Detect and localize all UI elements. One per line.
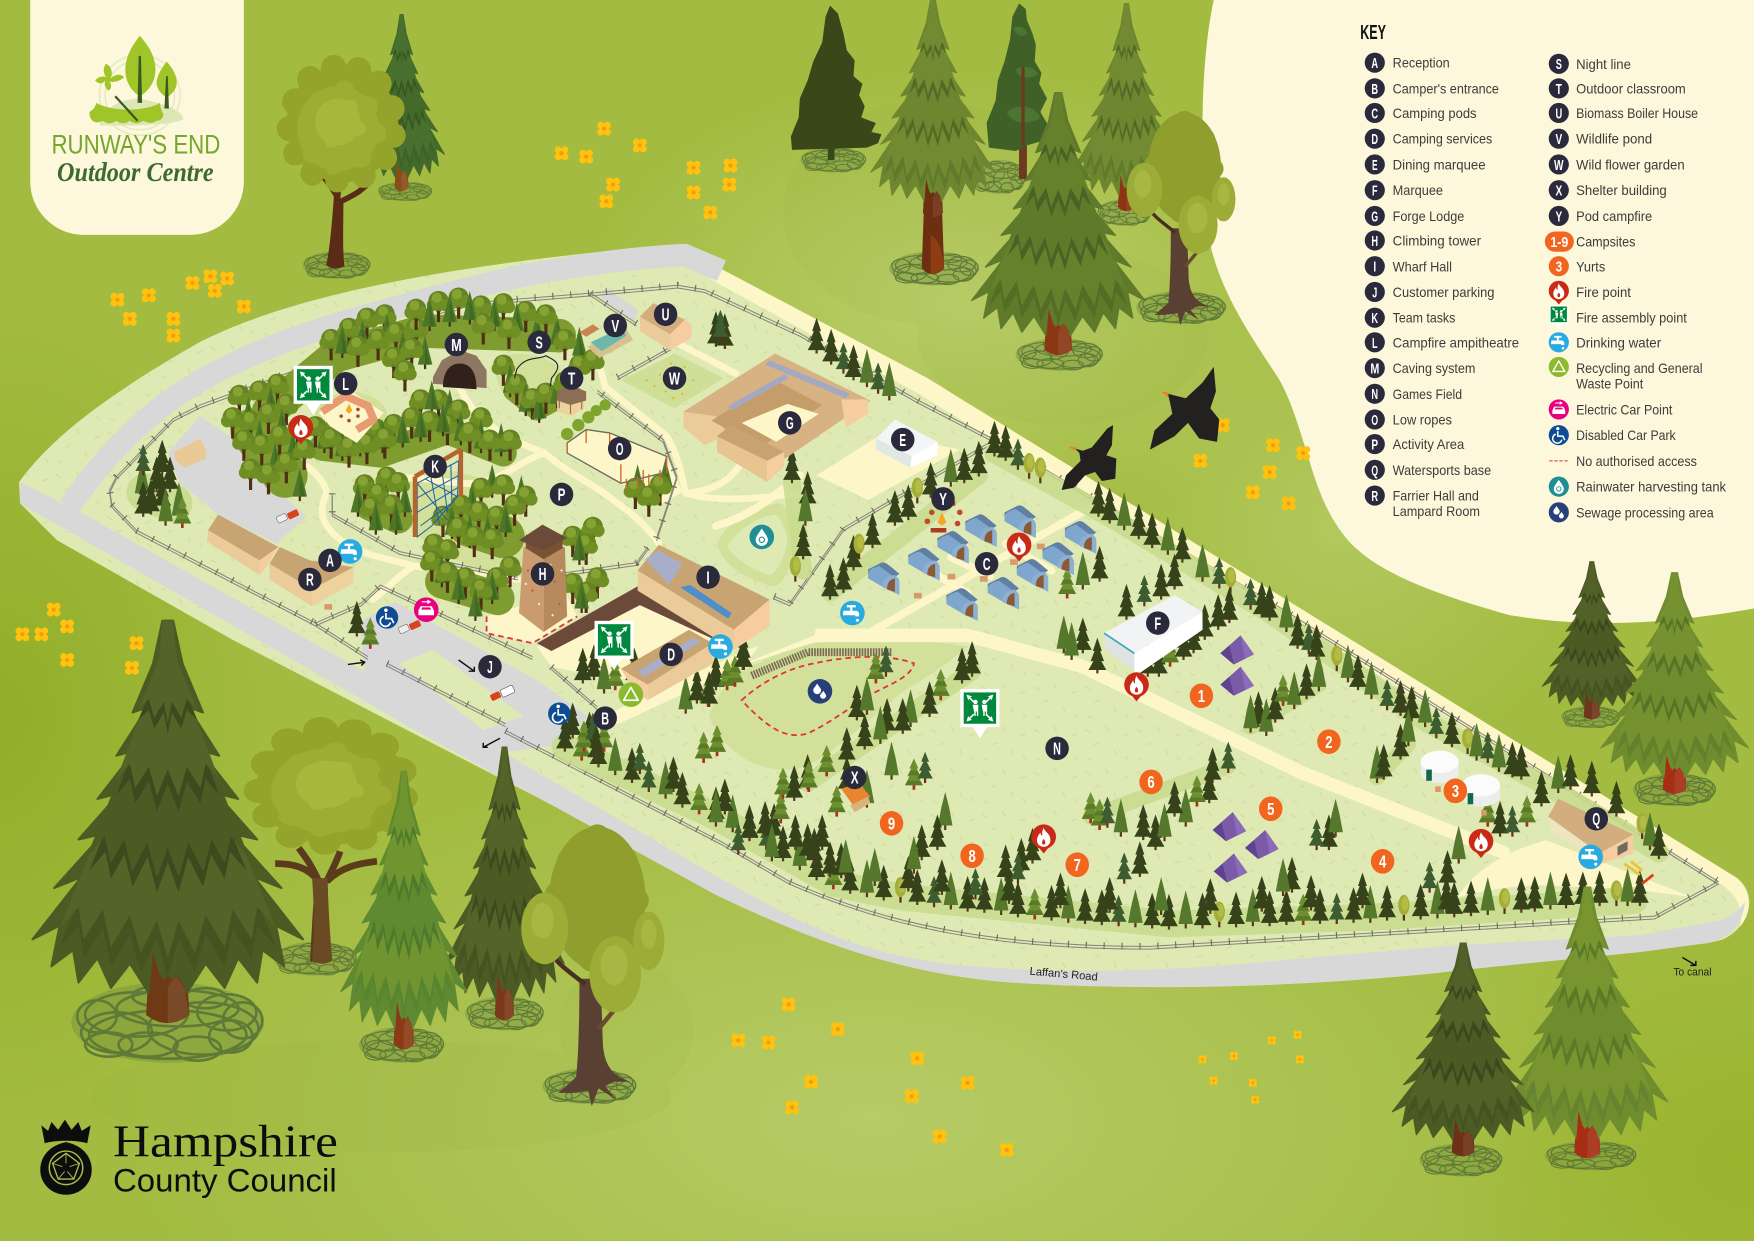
buildings [175, 303, 1653, 884]
label: to canal: To canal [1673, 966, 1711, 978]
marker: letter badges: E [899, 430, 906, 450]
marker: campsite numbers: 9 [888, 814, 895, 834]
key: B Camper's entrance: Camper's entrance [1393, 80, 1499, 96]
wordmark: Hampshire: Hampshire [113, 1116, 338, 1167]
key: N Games Field: N [1371, 386, 1378, 403]
pine groups on the camping fields [134, 310, 1520, 913]
marker: letter badges: W [669, 368, 681, 388]
building: T outdoor classroom [557, 385, 586, 416]
tree: leafy tree top right [1127, 111, 1235, 325]
key: L Campfire ampitheatre [1365, 332, 1519, 352]
logo mark [89, 36, 183, 135]
marker: letter badges: P [558, 485, 565, 505]
key: O Low ropes [1365, 409, 1452, 430]
site map [19, 244, 1749, 987]
key: L Campfire ampitheatre: Campfire ampitheatre [1393, 334, 1519, 350]
logo title: RUNWAY'S END [51, 129, 220, 159]
road label: Forge Ln: Forge Ln [348, 302, 396, 333]
west woodland canopy backing [253, 331, 570, 598]
tree scribble shadows [800, 147, 1226, 371]
green mounds [315, 353, 968, 770]
pine row north-east [986, 421, 1668, 859]
cars [276, 508, 515, 702]
key: Fire point: Fire point [1576, 284, 1631, 300]
car parks [168, 416, 587, 752]
key: Rainwater harvesting tank: Rainwater harvesting tank [1576, 479, 1726, 495]
building: V wildlife pond [579, 324, 633, 358]
marker: letter badges: R [306, 570, 314, 590]
key: Q Watersports base [1365, 460, 1491, 480]
key: X Shelter building: X [1555, 183, 1562, 200]
tree: spruce behind [987, 3, 1048, 179]
key: X Shelter building [1549, 180, 1667, 200]
marker: electric car point [414, 597, 438, 622]
marker: disabled car park [376, 606, 570, 725]
yurts [1421, 751, 1500, 807]
building: A reception [207, 515, 279, 575]
key: Electric Car Point: Electric Car Point [1576, 401, 1672, 417]
marker: campsite numbers: 1 [1198, 686, 1205, 706]
key: No authorised access: No authorised access [1576, 453, 1697, 469]
key: W Wild flower garden: Wild flower garden [1576, 156, 1685, 172]
key: D Camping services: Camping services [1393, 131, 1492, 147]
building: Q watersports base [1548, 799, 1633, 864]
marker: campsite numbers: 7 [1074, 855, 1081, 875]
key: A Reception: Reception [1393, 55, 1450, 71]
key: B Camper's entrance [1365, 78, 1499, 98]
tents [1213, 635, 1279, 883]
key: F Marquee [1365, 180, 1443, 200]
key: P Activity Area: Activity Area [1393, 436, 1465, 452]
key: N Games Field [1365, 384, 1462, 404]
building: M caving system [433, 350, 487, 389]
key: J Customer parking: J [1372, 284, 1377, 301]
key: Rainwater harvesting tank [1549, 477, 1726, 497]
key: T Outdoor classroom: T [1556, 81, 1562, 98]
key: Drinking water: Drinking water [1576, 334, 1662, 350]
key: I Wharf Hall: Wharf Hall [1393, 258, 1452, 274]
marker: letter badges [298, 303, 1608, 831]
key: L Campfire ampitheatre: L [1372, 335, 1378, 352]
key: C Camping pods [1365, 103, 1477, 123]
key: E Dining marquee: Dining marquee [1393, 156, 1486, 172]
key: F Marquee: F [1372, 183, 1378, 200]
trees bottom right [1392, 887, 1668, 1177]
panel: key background [1203, 0, 1754, 623]
key: J Customer parking: Customer parking [1393, 284, 1494, 300]
wild flowers [15, 122, 1310, 1157]
key: Disabled Car Park: Disabled Car Park [1576, 427, 1676, 443]
trees top right group [791, 0, 1235, 371]
key: D Camping services: D [1371, 131, 1378, 148]
key: T Outdoor classroom [1549, 78, 1686, 98]
tree: big dark pine [32, 621, 303, 1023]
key: 1-9 Campsites [1545, 232, 1635, 252]
bird: lower chough [1062, 425, 1116, 490]
key: H Climbing tower: H [1371, 233, 1378, 250]
marker: letter badges: J [487, 657, 493, 677]
key: Electric Car Point [1549, 399, 1672, 420]
tree: large pine front [972, 93, 1145, 355]
kayaks [1624, 861, 1653, 884]
key: Recycling and General Waste Point: Recycling and General [1576, 360, 1703, 376]
marker: letter badges: I [706, 567, 710, 587]
tree: lower-left oak [244, 717, 418, 964]
marker: campsite numbers: 4 [1379, 852, 1387, 872]
key: Y Pod campfire [1549, 206, 1652, 226]
logo: Hampshire County Council [40, 1116, 338, 1198]
marker: letter badges: Q [1592, 809, 1600, 829]
key: M Caving system: Caving system [1393, 360, 1475, 376]
key: R Farrier Hall and Lampard Room [1365, 485, 1480, 519]
key: G Forge Lodge: Forge Lodge [1393, 208, 1465, 224]
key: B Camper's entrance: B [1371, 81, 1378, 98]
road: Forge Ln [69, 255, 722, 507]
building: F marquee [1104, 595, 1203, 677]
road label: Laffan's Road: Laffan's Road [1029, 966, 1098, 984]
marker: letter badges: D [667, 645, 675, 665]
key: I Wharf Hall [1365, 256, 1452, 276]
marker: letter badges: N [1053, 739, 1061, 759]
key: R Farrier Hall and Lampard Room: R [1371, 488, 1378, 505]
building: R Farrier Hall [270, 547, 353, 606]
key: P Activity Area [1365, 434, 1465, 454]
tree shadows web [89, 101, 1208, 1152]
fences [110, 285, 1718, 949]
building: X shelter [841, 783, 870, 812]
marker: campsite numbers: 2 [1325, 732, 1333, 752]
team tasks net: K [415, 450, 461, 537]
key: O Low ropes: Low ropes [1393, 412, 1452, 428]
tree: dark silhouette pine [791, 6, 881, 160]
birds: black choughs [1062, 367, 1219, 490]
key: I Wharf Hall: I [1373, 259, 1376, 276]
trees bottom left [32, 621, 664, 1106]
key: 1-9 Campsites: 1-9 [1550, 234, 1568, 251]
marker: letter badges: A [326, 551, 334, 571]
key title: KEY [1360, 22, 1386, 44]
key: U Biomass Boiler House: U [1555, 105, 1562, 122]
tree: top-left pine [359, 15, 445, 191]
wordmark: County Council: County Council [113, 1162, 337, 1198]
key: E Dining marquee: E [1372, 157, 1378, 174]
building: L campfire amphitheatre [319, 393, 384, 443]
key: Recycling and General Waste Point [1549, 357, 1703, 392]
key: Disabled Car Park [1549, 425, 1676, 445]
key: R Farrier Hall and Lampard Room: Lampard Room [1393, 503, 1480, 519]
key: Q Watersports base: Q [1371, 462, 1378, 479]
marker: letter badges: K [431, 457, 439, 477]
bird: upper chough [1150, 367, 1219, 450]
tree: bottom-right light pine [1507, 887, 1668, 1158]
key: J Customer parking [1365, 282, 1494, 302]
key: Sewage processing area [1549, 502, 1714, 522]
key: Drinking water [1549, 332, 1662, 352]
key: 3 Yurts: Yurts [1576, 258, 1605, 274]
building: U biomass boiler house [640, 303, 691, 350]
marker: fire assembly points [294, 366, 999, 738]
key: D Camping services [1365, 129, 1492, 149]
forest shading halos [145, 453, 1659, 924]
key: C Camping pods: C [1371, 105, 1378, 122]
key: K Team tasks: Team tasks [1393, 310, 1455, 326]
cream boundary track [688, 245, 1749, 926]
key: N Games Field: Games Field [1393, 386, 1462, 402]
key: M Caving system: M [1370, 361, 1379, 378]
cream paths [308, 343, 1692, 897]
pine row south [556, 702, 1649, 930]
bushes by low ropes [561, 399, 611, 440]
building: E dining marquee [876, 419, 937, 468]
key: Sewage processing area: Sewage processing area [1576, 504, 1714, 520]
key legend [1360, 22, 1726, 522]
marker: campsite numbers: 6 [1147, 772, 1155, 792]
marker: sewage area [808, 679, 832, 704]
tree: top-left oak [277, 55, 406, 268]
building: small store by forge lane [175, 439, 206, 468]
marker: letter badges: G [786, 413, 794, 433]
key: 1-9 Campsites: Campsites [1576, 234, 1635, 250]
site land [19, 244, 1749, 987]
key: U Biomass Boiler House [1549, 103, 1698, 123]
key: W Wild flower garden [1549, 154, 1685, 175]
marker: letter badges: M [451, 335, 462, 355]
marker: letter badges: V [611, 316, 619, 336]
marker: letter badges: Y [939, 489, 947, 509]
panel: logo [30, 0, 244, 235]
woodland clusters west [221, 287, 673, 621]
marker: letter badges: C [983, 554, 991, 574]
trees top left group [277, 15, 445, 279]
marker: fire points [289, 415, 1493, 858]
marker: letter badges: L [342, 374, 349, 394]
road: Laffan's Road [20, 482, 1745, 987]
key: Fire assembly point: Fire assembly point [1576, 310, 1687, 326]
key: V Wildlife pond [1549, 129, 1652, 149]
key: X Shelter building: Shelter building [1576, 182, 1667, 198]
key: S Night line: Night line [1576, 56, 1631, 72]
key: Recycling and General Waste Point: Waste Point [1576, 376, 1643, 392]
road: access strip [604, 293, 635, 315]
key: R Farrier Hall and Lampard Room: Farrier Hall and [1393, 488, 1479, 504]
key: 3 Yurts [1549, 256, 1605, 276]
arrow: to canal [1682, 958, 1696, 965]
crest [40, 1120, 92, 1195]
key: S Night line: S [1556, 56, 1562, 73]
marker: letter badges: U [662, 305, 669, 325]
marker: campsite numbers [880, 683, 1467, 877]
campfire: Y pod campfire [925, 501, 963, 532]
tree: tall pine [871, 0, 995, 274]
key: K Team tasks [1365, 308, 1455, 328]
timber fence at sewage area [752, 652, 892, 676]
wild flowers dots W [645, 362, 695, 399]
key: P Activity Area: P [1371, 437, 1378, 454]
marker: letter badges: F [1154, 613, 1161, 633]
key: G Forge Lodge: G [1371, 208, 1378, 225]
key: V Wildlife pond: V [1555, 131, 1562, 148]
key: E Dining marquee [1365, 154, 1486, 175]
key: 3 Yurts: 3 [1555, 259, 1562, 276]
marker: recycling [619, 682, 643, 707]
key: C Camping pods: Camping pods [1393, 105, 1477, 121]
marker: campsite numbers: 5 [1267, 799, 1275, 819]
arrows on the roads [348, 660, 500, 747]
sewage area no-access line [742, 657, 914, 735]
marker: letter badges: O [616, 439, 624, 459]
low ropes: O [567, 430, 667, 490]
tree: bottom-right dark pine [1392, 943, 1534, 1156]
building: I Wharf Hall [537, 545, 770, 651]
marker: drinking water [338, 539, 1603, 869]
key: O Low ropes: O [1371, 412, 1378, 429]
key: M Caving system [1365, 358, 1475, 378]
key: S Night line [1549, 54, 1631, 74]
pallets [324, 544, 1487, 815]
map markers [289, 303, 1608, 877]
key: Fire assembly point [1549, 305, 1687, 329]
key: F Marquee: Marquee [1393, 182, 1443, 198]
key: G Forge Lodge [1365, 206, 1465, 226]
marker: campsite numbers: 3 [1452, 781, 1459, 801]
key: Q Watersports base: Watersports base [1393, 462, 1491, 478]
marker: letter badges: H [539, 564, 546, 584]
key: H Climbing tower: Climbing tower [1393, 233, 1481, 249]
marker: letter badges: S [536, 333, 543, 353]
marker: letter badges: B [601, 708, 609, 728]
key: H Climbing tower [1365, 230, 1481, 251]
tree: pine far right back [1074, 3, 1179, 211]
tree: mid-green pine [341, 772, 467, 1050]
marker: campsite numbers: 8 [968, 846, 976, 866]
trees right [1542, 562, 1748, 806]
net line: S night line [515, 356, 558, 386]
tree: pine behind [445, 747, 564, 1021]
tree: right dark pine [1542, 562, 1642, 719]
key: A Reception [1365, 53, 1450, 73]
logo subtitle: Outdoor Centre [57, 157, 214, 188]
key: U Biomass Boiler House: Biomass Boiler House [1576, 105, 1698, 121]
pods: camping pods [868, 505, 1096, 621]
marker: letter badges: T [568, 368, 576, 388]
key: W Wild flower garden: W [1554, 157, 1564, 174]
marker: letter badges: X [851, 768, 859, 788]
key: A Reception: A [1371, 55, 1378, 72]
key: V Wildlife pond: Wildlife pond [1576, 131, 1652, 147]
building: D camping services [621, 630, 713, 700]
building: H climbing tower [519, 525, 567, 632]
key: Y Pod campfire: Pod campfire [1576, 208, 1652, 224]
marker: rainwater tank [749, 525, 774, 549]
tree: leafy tree [521, 824, 664, 1106]
key: Fire point [1549, 281, 1631, 305]
key: Y Pod campfire: Y [1555, 208, 1562, 225]
tower no-access line [487, 616, 577, 643]
key: T Outdoor classroom: Outdoor classroom [1576, 80, 1686, 96]
building: G Forge Lodge [683, 353, 870, 482]
key: K Team tasks: K [1371, 310, 1378, 327]
tree: right light pine [1601, 573, 1748, 794]
